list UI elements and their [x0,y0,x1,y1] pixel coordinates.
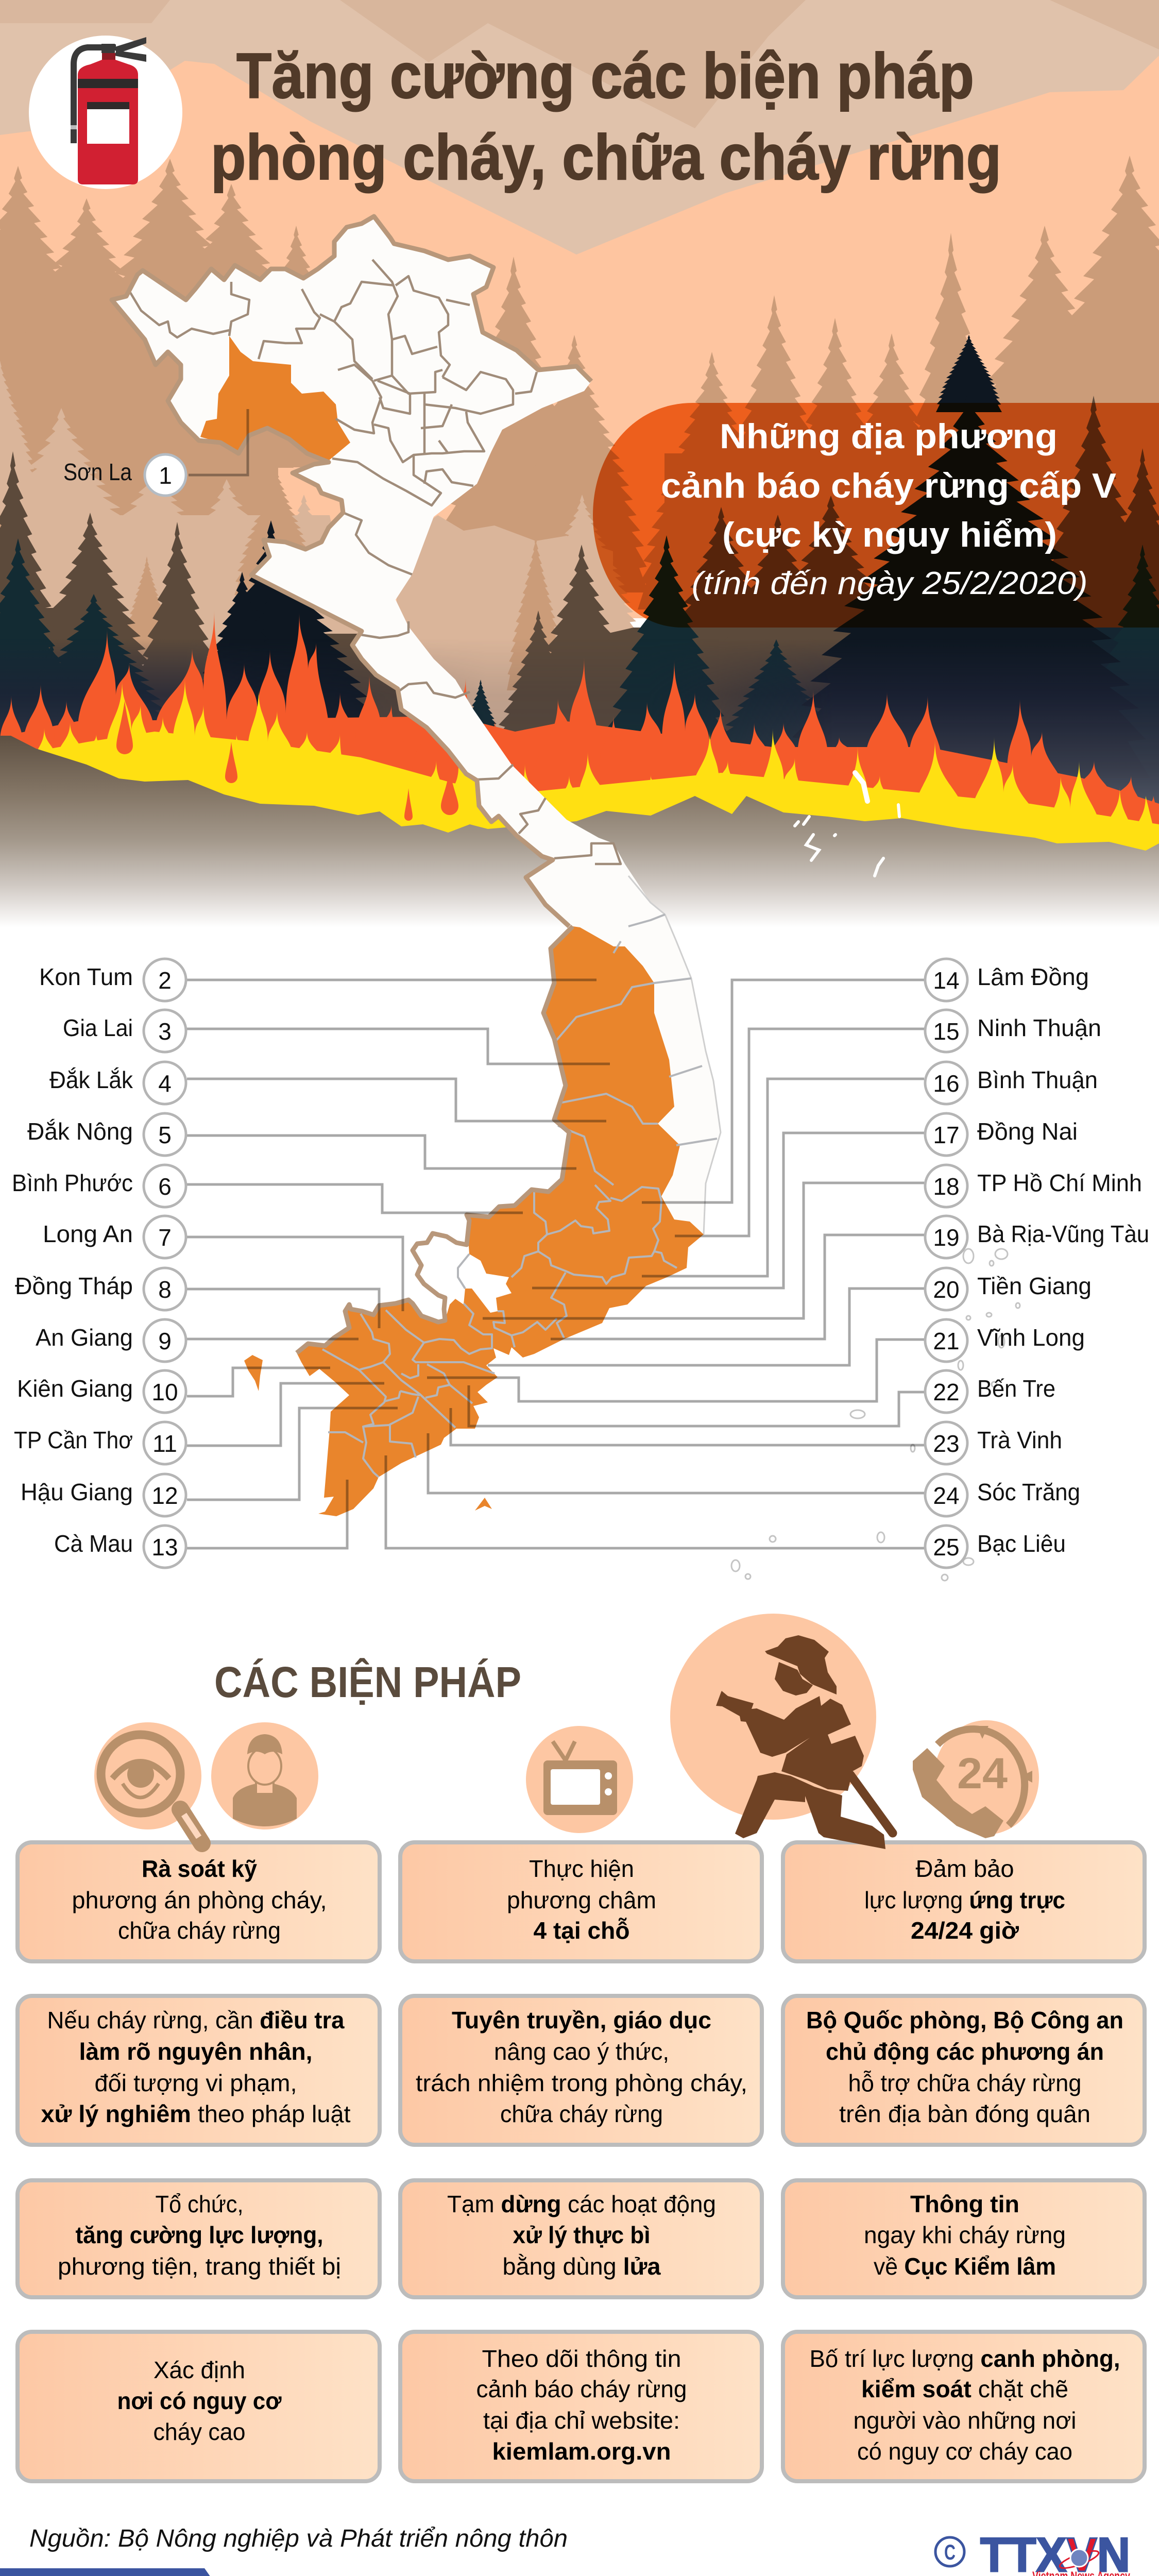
panel backdrop: title of warning [593,403,1159,628]
panel text: warning heading: cảnh báo cháy rừng cấp V [661,466,1116,505]
measures row 2 text: chủ động các phương án [826,2038,1104,2065]
right province labels: Bà Rịa-Vũng Tàu [977,1221,1149,1247]
left province labels: 2 [158,967,172,994]
measures row 2 text: làm rõ nguyên nhân, [79,2038,312,2065]
panel: measures row 3 [18,2180,1145,2297]
far tree layer [0,156,1159,680]
measures row 3 text: tăng cường lực lượng, [75,2222,323,2248]
left province labels: TP Cần Thơ [14,1427,133,1453]
measures row 4 text: có nguy cơ cháy cao [857,2438,1072,2465]
panel: measures row 1 [18,1842,1145,1961]
right province labels: Lâm Đồng [977,963,1089,990]
measures row 4 text: cháy cao [154,2418,245,2445]
measures row 4 text: Xác định [154,2357,245,2383]
left province labels: Kon Tum [39,963,133,990]
measures row 3 text [58,2191,1066,2280]
right province labels: 16 [933,1070,960,1097]
left province labels: Đồng Tháp [15,1273,133,1299]
measures row 4 text: nơi có nguy cơ [117,2387,282,2414]
southern provinces highlighted [297,926,704,1516]
title: phòng cháy, chữa cháy rừng [211,122,1001,193]
panel text: warning heading: (cực kỳ nguy hiểm) [722,515,1057,554]
heading: các biện pháp: CÁC BIỆN PHÁP [214,1658,521,1706]
right province labels: Bình Thuận [977,1066,1098,1093]
right province labels: 22 [933,1379,960,1405]
measures row 2 text: xử lý nghiêm theo pháp luật [41,2100,351,2127]
measures row 1 text: phương châm [507,1887,656,1913]
left province labels: Hậu Giang [21,1479,133,1505]
measures row 3 text: xử lý thực bì [513,2222,650,2248]
left province labels: Đắk Lắk [49,1066,133,1093]
icon: firefighter [670,1614,893,1849]
left province labels: 3 [158,1018,172,1045]
Hoàng Sa islands [795,773,899,876]
icon: fire extinguisher [29,36,182,189]
northern province borders [130,260,621,864]
icon: 24 hour phone: 24 [957,1749,1008,1798]
Phú Quốc island [244,1355,263,1391]
measures row 3 text: phương tiện, trang thiết bị [58,2253,341,2280]
Sơn La province highlighted [200,336,350,461]
Cambodia border segment [297,926,573,1353]
title: Tăng cường các biện pháp [236,41,974,112]
Côn Đảo island [475,1498,492,1511]
measures row 2 text: trên địa bàn đóng quân [839,2100,1090,2127]
tree streaks over tan [122,466,565,690]
measures row 2 text: trách nhiệm trong phòng cháy, [416,2070,747,2096]
left province labels: Kiên Giang [17,1375,133,1402]
measures row 1 text: 4 tại chỗ [534,1917,629,1944]
measures row 2 text: hỗ trợ chữa cháy rừng [848,2070,1082,2096]
left province labels: Cà Mau [54,1530,133,1557]
measures row 1 text: Rà soát kỹ [142,1855,257,1882]
icon: magnifier with eye [94,1722,202,1843]
right province labels: 18 [933,1173,960,1200]
left province labels: 10 [151,1379,178,1405]
right province labels: 20 [933,1276,960,1303]
land border [112,216,591,926]
right province labels: 15 [933,1018,960,1045]
left province labels: 13 [151,1534,178,1561]
measures row 2 text: Bộ Quốc phòng, Bộ Công an [806,2007,1123,2033]
right province labels: Vĩnh Long [977,1324,1085,1351]
measures row 1 text: phương án phòng cháy, [72,1887,327,1913]
measures row 4 text: cảnh báo cháy rừng [476,2376,687,2402]
measures row 4 text: kiểm soát chặt chẽ [861,2376,1068,2402]
right province labels: 23 [933,1430,960,1457]
left province labels: 12 [151,1482,178,1509]
measures row 4 text [117,2345,1120,2465]
label: Sơn La: Sơn La [63,459,132,485]
left province labels: Long An [43,1221,133,1247]
left province labels: Đắk Nông [27,1118,133,1145]
measures row 3 text: bằng dùng lửa [503,2253,661,2280]
right province labels: Bạc Liêu [977,1530,1066,1557]
mid tree layer: light tan [0,361,640,788]
left province labels: 8 [158,1276,172,1303]
measures row 1 text: 24/24 giờ [911,1917,1019,1944]
measures row 4 text: tại địa chỉ website: [483,2407,680,2434]
east coast outline [628,876,721,1234]
title [211,41,1001,193]
measures row 4 text: kiemlam.org.vn [492,2438,671,2465]
measures row 2 text: chữa cháy rừng [500,2100,663,2127]
measures row 3 text: Thông tin [910,2191,1019,2217]
Trường Sa islands [731,1249,1020,1581]
left province labels: An Giang [36,1324,133,1351]
left province labels: 4 [158,1070,172,1097]
left province labels [12,959,186,1568]
measures row 1 text: Đảm bảo [916,1855,1014,1882]
measures row 3 text: về Cục Kiểm lâm [874,2253,1056,2280]
measures row 2 text [41,2007,1123,2127]
measures row 1 text: lực lượng ứng trực [864,1887,1065,1913]
panel text: warning heading [661,417,1116,601]
left province labels: 9 [158,1328,172,1354]
measures row 4 text: Theo dõi thông tin [482,2345,681,2372]
panel: measures row 2 [18,1996,1145,2145]
left province labels: Bình Phước [12,1170,133,1196]
measures row 2 text: Tuyên truyền, giáo dục [452,2007,711,2033]
map of Vietnam [112,216,1020,1581]
background: mountains and sky [0,0,1159,618]
right province labels: Tiền Giang [977,1273,1092,1299]
measures row 4 text: Bố trí lực lượng canh phòng, [810,2345,1120,2372]
darkest tree layer [0,335,1159,844]
southern province borders [322,914,717,1477]
leader lines [187,409,924,1548]
ground fading to white [0,736,1159,933]
measures row 1 text [72,1855,1065,1944]
left province labels: 11 [152,1430,177,1457]
panel text: warning heading: Những địa phương [720,417,1058,456]
right province labels: TP Hồ Chí Minh [977,1170,1142,1196]
left province labels: 6 [158,1173,172,1200]
smoke shading over trees [0,642,1159,804]
right province labels: 21 [933,1328,960,1354]
footer bar [0,2568,1159,2576]
right province labels: 17 [933,1122,960,1148]
measures row 1 text: Thực hiện [529,1855,634,1882]
flames: yellow [21,678,1159,860]
right province labels: 14 [933,967,960,994]
label: Sơn La: 1 [159,462,172,489]
right province labels [925,959,1149,1568]
near tree layer: dark brown [0,396,1159,831]
right province labels: Sóc Trăng [977,1479,1080,1505]
source note: Nguồn: Bộ Nông nghiệp và Phát triển nông thôn [29,2525,568,2552]
right province labels: 24 [933,1482,960,1509]
measures row 3 text: ngay khi cháy rừng [864,2222,1066,2248]
right province labels: 19 [933,1224,960,1251]
right province labels: Bến Tre [977,1375,1055,1402]
measures row 2 text: nâng cao ý thức, [494,2038,669,2065]
left province labels: Gia Lai [63,1014,133,1041]
right province labels: Đồng Nai [977,1118,1078,1145]
measures row 2 text: đối tượng vi phạm, [95,2070,297,2096]
logo: TTXVN: C [944,2540,956,2564]
right province labels: Ninh Thuận [977,1014,1101,1041]
measures row 2 text: Nếu cháy rừng, cần điều tra [47,2007,345,2033]
left province labels: 7 [158,1224,172,1251]
measures row 4 text: người vào những nơi [853,2407,1077,2434]
flames: orange [0,610,1159,855]
measures row 1 text: chữa cháy rừng [118,1917,281,1944]
land area [112,216,721,1234]
measures row 3 text: Tạm dừng các hoạt động [447,2191,716,2217]
icon: person [211,1722,318,1829]
icon: television [526,1726,633,1833]
icon: 24 hour phone [913,1720,1039,1838]
measures row 3 text: Tổ chức, [156,2191,243,2217]
right province labels: Trà Vinh [977,1427,1062,1453]
panel: measures row 4 [18,2332,1145,2481]
label: Sơn La [63,454,186,496]
left province labels: 5 [158,1122,172,1148]
right province labels: 25 [933,1534,960,1561]
panel text: warning heading: (tính đến ngày 25/2/2020) [691,566,1088,601]
